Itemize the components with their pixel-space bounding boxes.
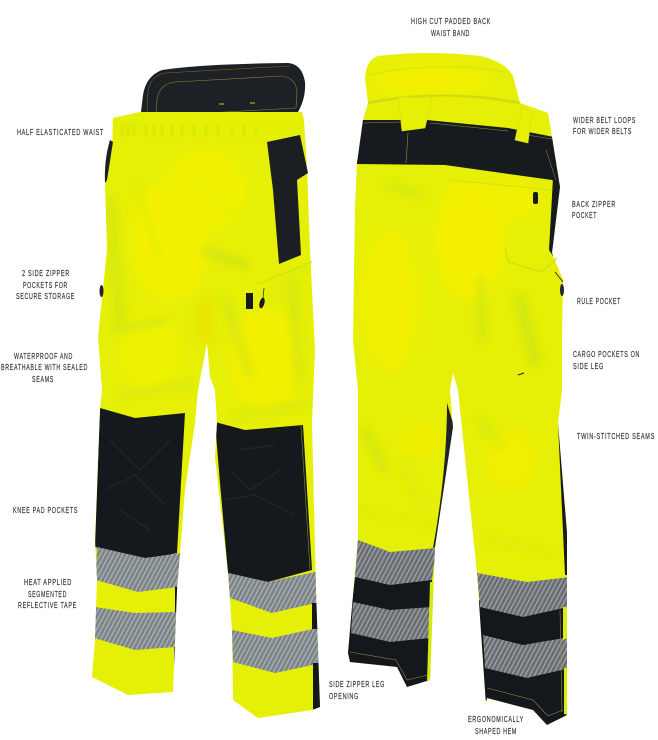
back-right outer black strip xyxy=(558,423,567,575)
back-right lower leg black xyxy=(478,600,569,730)
label: back zipper pocket: BACK ZIPPER xyxy=(572,200,616,209)
label: side zipper leg opening: OPENING xyxy=(329,692,359,701)
back yoke black panel xyxy=(355,120,562,187)
label: high cut padded back waistband xyxy=(411,17,491,38)
yellow body, front view xyxy=(85,105,325,725)
front-right reflective bands xyxy=(228,571,320,613)
label: ergonomically shaped hem xyxy=(468,715,524,736)
front-left side strip xyxy=(175,587,178,612)
back-left lower leg black xyxy=(345,577,432,690)
label: high cut padded back waistband: HIGH CUT PADDED BACK xyxy=(411,17,491,26)
label: back zipper pocket: POCKET xyxy=(572,211,597,220)
label: reflective tape xyxy=(18,578,77,610)
label: cargo pockets: SIDE LEG xyxy=(573,362,604,371)
label: ergonomically shaped hem: ERGONOMICALLY xyxy=(468,715,524,724)
label: reflective tape: SEGMENTED xyxy=(28,590,67,599)
back belt loops xyxy=(398,97,532,143)
label: side zipper pockets: SECURE STORAGE xyxy=(16,292,75,301)
label: reflective tape: REFLECTIVE TAPE xyxy=(18,601,77,610)
label: waterproof and breathable xyxy=(1,352,88,384)
label: side zipper leg opening: SIDE ZIPPER LEG xyxy=(329,680,385,689)
label: reflective tape: HEAT APPLIED xyxy=(24,578,72,587)
back-left reflective bands xyxy=(355,540,436,585)
label: waterproof and breathable: SEAMS xyxy=(32,375,54,384)
back-right yellow side strip xyxy=(563,607,567,640)
label: rule pocket: RULE POCKET xyxy=(577,297,621,306)
front zipper tag and pulls xyxy=(100,262,312,309)
back side black strip xyxy=(549,180,560,256)
label: wider belt loops xyxy=(573,116,636,136)
label: half elasticated waist: HALF ELASTICATED WAIST xyxy=(17,128,104,137)
label: side zipper leg opening xyxy=(329,680,385,701)
front-right side strip xyxy=(312,603,318,629)
label: waterproof and breathable: WATERPROOF AND xyxy=(14,352,73,361)
label: ergonomically shaped hem: SHAPED HEM xyxy=(475,727,517,736)
back-left yellow side strip xyxy=(427,582,434,682)
left side black gusset xyxy=(105,140,113,183)
back inner leg black strip xyxy=(433,403,454,548)
front-left reflective bands xyxy=(96,547,181,592)
yellow body, back view xyxy=(340,45,575,735)
back-right reflective bands xyxy=(477,573,570,617)
label: cargo pockets xyxy=(573,350,640,371)
label: side zipper pockets: POCKETS FOR xyxy=(23,281,68,290)
padded back waistband, black, front view xyxy=(140,63,305,122)
label: back zipper pocket xyxy=(572,200,616,220)
label: high cut padded back waistband: WAIST BAND xyxy=(431,29,470,38)
back trousers xyxy=(340,45,575,735)
label: side zipper pockets xyxy=(16,269,75,301)
front trousers xyxy=(85,63,325,725)
front hip pocket panel xyxy=(267,135,308,264)
label: knee pad pockets: KNEE PAD POCKETS xyxy=(13,506,78,515)
back waistband seam shading xyxy=(368,96,520,103)
back pocket zip and rule pocket xyxy=(450,180,564,375)
front-right knee panel xyxy=(215,422,312,582)
label: side zipper pockets: 2 SIDE ZIPPER xyxy=(22,269,70,278)
label: waterproof and breathable: BREATHABLE WITH SEALED xyxy=(1,363,88,372)
front-left knee panel xyxy=(95,408,185,560)
